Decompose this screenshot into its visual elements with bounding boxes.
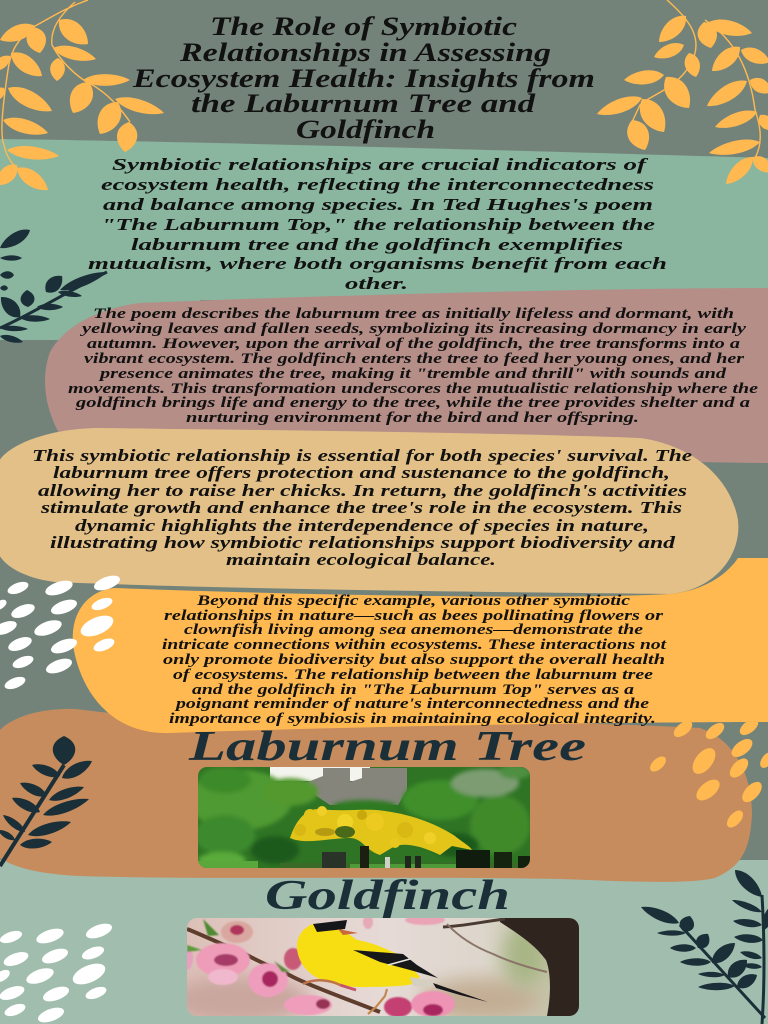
flowering yellow canopy: [290, 806, 472, 855]
text block: poem description: The poem describes the laburnum tree as initially lifeless and dormant, with: [93, 306, 734, 322]
text block: poem description: yellowing leaves and fallen seeds, symbolizing its increasing dormancy in early: [79, 321, 747, 337]
title: [132, 12, 595, 144]
text block: introduction: and balance among species. In Ted Hughes's poem: [103, 195, 653, 214]
title: The Role of Symbiotic: [210, 12, 518, 41]
title: Goldfinch: [296, 115, 435, 144]
text block: survival: maintain ecological balance.: [226, 550, 496, 569]
text block: introduction: mutualism, where both organisms benefit from each: [88, 254, 667, 273]
title: Relationships in Assessing: [179, 38, 551, 67]
icon: dark plant bottom right: [639, 866, 768, 1024]
text block: survival: illustrating how symbiotic relationships support biodiversity and: [50, 533, 676, 552]
text block: poem description: nurturing environment for the bird and her offspring.: [186, 410, 639, 426]
text block: other examples: poignant reminder of nature's interconnectedness and the: [173, 696, 650, 712]
icon: yellow leaf branch top left: [0, 0, 166, 196]
text block: poem description: presence animates the tree, making it "tremble and thrill" with sounds and: [97, 366, 727, 382]
text block: introduction: "The Laburnum Top," the relationship between the: [101, 215, 656, 234]
text block: introduction: laburnum tree and the goldfinch exemplifies: [131, 235, 624, 254]
text block: other examples: Beyond this specific example, various other symbiotic: [196, 593, 631, 609]
text block: other examples: and the goldfinch in "The Laburnum Top" serves as a: [192, 682, 634, 698]
panel: orange examples block: [73, 558, 768, 733]
panel: tan survival block: [0, 428, 738, 594]
bird: [297, 920, 488, 1014]
decoration: white dots lower: [0, 921, 115, 1024]
text block: other examples: only promote biodiversity but also support the overall health: [163, 652, 665, 668]
text block: poem description: [68, 306, 759, 426]
text block: poem description: movements. This transformation underscores the mutualistic relationship where the: [68, 381, 759, 397]
text block: other examples: clownfish living among sea anemones—demonstrate the: [184, 622, 644, 638]
text block: survival: allowing her to raise her chicks. In return, the goldfinch's activities: [38, 481, 687, 500]
decoration: white dots upper: [0, 573, 123, 692]
text block: introduction: Symbiotic relationships are crucial indicators of: [112, 155, 650, 174]
panel: bottom background: [0, 860, 768, 1024]
blossoms: [181, 915, 455, 1017]
title: the Laburnum Tree and: [191, 89, 536, 118]
text block: other examples: of ecosystems. The relationship between the laburnum tree: [173, 667, 654, 683]
heading: Laburnum Tree: Laburnum Tree: [188, 724, 586, 770]
panel: mint intro band: [0, 139, 768, 340]
text block: other examples: intricate connections within ecosystems. These interactions not: [162, 637, 667, 653]
image: laburnum tree: [188, 765, 531, 868]
text block: poem description: goldfinch brings life and energy to the tree, while the tree provides shelter and a: [75, 395, 750, 411]
text block: survival: [32, 446, 692, 569]
blossom branch: [187, 929, 380, 1012]
text block: introduction: [88, 155, 667, 293]
decoration: orange dots: [647, 715, 768, 832]
text block: survival: dynamic highlights the interdependence of species in nature,: [75, 516, 649, 535]
icon: dark plant mid left: [0, 225, 109, 345]
bottom trunks and graveyard: [198, 846, 530, 868]
text block: survival: stimulate growth and enhance the tree's role in the ecosystem. This: [40, 498, 682, 517]
icon: yellow leaf branch top right: [595, 0, 768, 189]
text block: survival: laburnum tree offers protection and sustenance to the goldfinch,: [53, 463, 670, 482]
title: Ecosystem Health: Insights from: [132, 64, 595, 93]
text block: other examples: importance of symbiosis in maintaining ecological integrity.: [169, 711, 656, 727]
heading: Goldfinch: Goldfinch: [265, 873, 510, 919]
text block: poem description: autumn. However, upon the arrival of the goldfinch, the tree transforms into a: [87, 336, 740, 352]
tree trunk: [500, 918, 579, 1016]
text block: introduction: other.: [345, 274, 408, 293]
text block: other examples: [162, 593, 667, 727]
text block: other examples: relationships in nature—such as bees pollinating flowers or: [164, 608, 663, 624]
text block: poem description: vibrant ecosystem. The goldfinch enters the tree to feed her young ones, and her: [84, 351, 744, 367]
icon: dark plant on brown panel: [0, 736, 95, 866]
panel: brown images block: [0, 709, 752, 882]
text block: survival: This symbiotic relationship is essential for both species' survival. The: [32, 446, 692, 465]
panel: rose poem block: [45, 288, 768, 463]
text block: introduction: ecosystem health, reflecting the interconnectedness: [101, 175, 655, 194]
image: goldfinch: [187, 918, 579, 1016]
